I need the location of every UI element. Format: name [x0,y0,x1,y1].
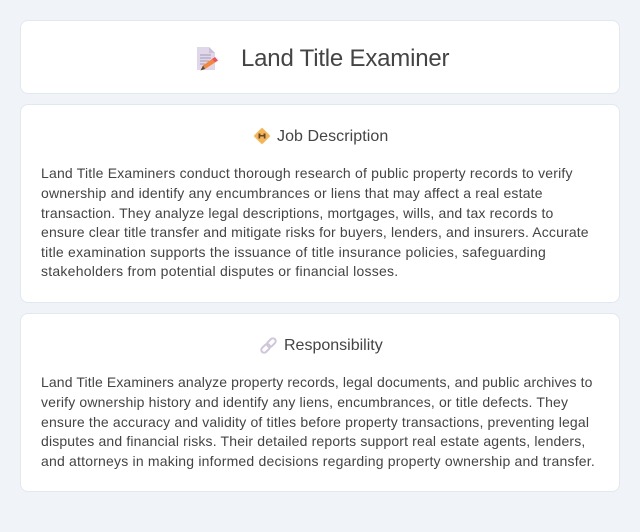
text: responsibility body: Land Title Examiners analyze property records, legal documents, and public archives to [41,374,593,390]
text: responsibility body: disputes and financial risks. Their detailed reports support real estate agents, lenders, [41,433,585,449]
text: job description body: ensure clear title transfer and mitigate risks for buyers, lenders, and insurers. Accurate [41,224,589,240]
text: job description body: ownership and identify any encumbrances or liens that may affect a real estate [41,185,543,201]
icon: chain link [260,337,277,354]
text: responsibility body: ensure the accuracy and validity of titles before property transactions, preventing legal [41,414,589,430]
heading: Land Title Examiner: Land Title Examiner [241,45,449,72]
text: job description body: Land Title Examiners conduct thorough research of public property records to verify [41,165,573,181]
icon: document with pencil [197,47,218,70]
panel: job description [20,104,620,303]
text: responsibility body: verify ownership history and identify any liens, encumbrances, or title defects. They [41,394,568,410]
panel: title [20,20,620,94]
icon: orange diamond sign [254,128,270,144]
heading: Responsibility: Responsibility [284,337,383,354]
text: job description body [41,165,589,279]
text: job description body: title examination supports the issuance of title insurance policies, safeguarding [41,244,546,260]
text: job description body: stakeholders from potential disputes or financial losses. [41,263,398,279]
text: responsibility body: and attorneys in making informed decisions regarding property ownership and transfer. [41,453,595,469]
text: responsibility body [41,374,595,469]
heading: Job Description: Job Description [277,128,388,145]
text: job description body: transaction. They analyze legal descriptions, mortgages, wills, and tax records to [41,205,553,221]
panel: responsibility [20,313,620,492]
